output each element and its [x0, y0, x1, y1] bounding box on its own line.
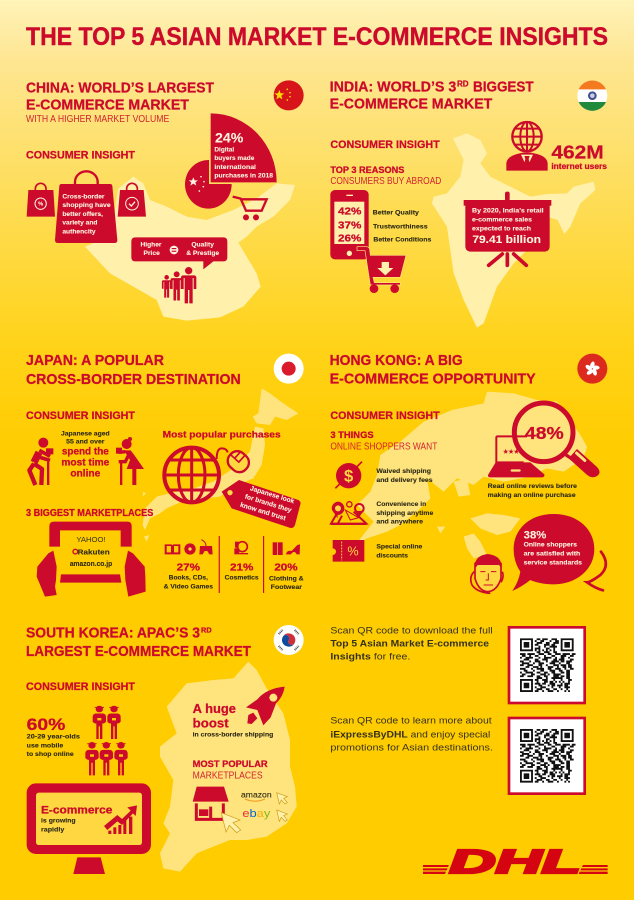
stat: magnifier 48%	[514, 403, 600, 477]
map: japan	[143, 388, 298, 542]
heading: india: INDIA: WORLD’S 3	[330, 80, 456, 96]
callout: higher price equals quality: Price	[144, 250, 160, 257]
text: aged 55 and over: 55 and over	[66, 439, 105, 446]
heading: south korea: LARGEST E-COMMERCE MARKET	[26, 644, 251, 660]
icon: discount ticket	[333, 540, 364, 562]
stat: books, cds and video games	[164, 540, 214, 590]
icon: discount bag	[27, 183, 55, 217]
subheading: consumer insight: CONSUMER INSIGHT	[26, 681, 135, 693]
heading: china	[26, 80, 214, 125]
stat: clothing and footwear	[263, 536, 304, 593]
icon: south korea flag	[274, 625, 304, 655]
icon: text shopping bag: shopping have	[62, 202, 111, 209]
icon: globe and mouse	[164, 448, 253, 502]
stat: cosmetics: 21%	[230, 563, 253, 574]
list: reasons: Better Conditions	[373, 236, 432, 243]
icon: shopping cart	[233, 197, 267, 220]
icon: discount ticket: %	[347, 545, 359, 559]
icon: text shopping bag: Cross-border	[62, 193, 105, 200]
icon: internet user	[506, 122, 548, 171]
callout: speech bubble 38%	[512, 514, 594, 591]
callout: billboard retail sales: 79.41 billion	[472, 234, 541, 246]
text: special discounts	[376, 544, 423, 559]
callout: price tag: Japanese look	[249, 485, 295, 505]
heading: india: BIGGEST	[473, 80, 534, 96]
text: a huge boost: A huge	[193, 701, 236, 716]
qr code: download insights	[508, 626, 586, 704]
subheading: 3 things: 3 THINGS	[330, 430, 374, 440]
callout: billboard retail sales: e-commerce sales	[472, 217, 532, 224]
callout: higher price equals quality: & Prestige	[186, 250, 219, 257]
logo: ebay: ebay	[242, 808, 271, 820]
icon: phone with reasons: 42%	[338, 207, 361, 218]
text: convenience: and anywhere	[376, 519, 423, 526]
subheading: most popular marketplaces: MARKETPLACES	[193, 770, 263, 781]
icon: store	[193, 787, 229, 819]
stat: 60% mobile shoppers: to shop online	[27, 751, 74, 758]
text: read online reviews: Read online reviews before	[488, 483, 577, 490]
icon: japan flag	[274, 354, 304, 384]
icon: monitor e-commerce	[27, 783, 151, 874]
icon: text shopping bag: authencity	[62, 228, 96, 235]
stat: 60% mobile shoppers: 60%	[27, 715, 66, 734]
heading: india	[330, 80, 534, 113]
icon: india flag	[577, 81, 607, 111]
text: special discounts: Special online	[376, 544, 423, 551]
panel: qr codes and logo	[330, 626, 608, 881]
icon: map pins	[331, 502, 366, 525]
icon: phone with reasons: 37%	[338, 220, 361, 231]
subheading: 3 biggest marketplaces: 3 BIGGEST MARKETPLACES	[26, 508, 154, 519]
panel: south korea	[26, 625, 304, 874]
stat: internet users	[551, 142, 608, 171]
text: aged 55 and over	[61, 430, 110, 480]
heading: south korea: RD	[201, 626, 212, 635]
heading: india: E-COMMERCE MARKET	[330, 97, 493, 113]
callout: price tag	[222, 480, 301, 528]
panel: india	[330, 80, 608, 328]
stat: magnifier 48%: 48%	[525, 423, 564, 443]
icon: rocket	[246, 687, 285, 725]
subheading: top 3 reasons: TOP 3 REASONS	[330, 165, 404, 175]
text: read online reviews: making an online purchase	[488, 492, 576, 499]
icon: text shopping bag	[55, 171, 117, 243]
stat: books, cds and video games: Books, CDs,	[169, 574, 208, 581]
icon: five mobile shoppers	[85, 706, 128, 775]
chart: 24% pie: buyers made	[214, 155, 255, 162]
logo: amazon: amazon	[241, 790, 272, 800]
icon: waived dollar: $	[344, 467, 354, 486]
subheading: most popular purchases: Most popular purchases	[163, 429, 281, 439]
stat: books, cds and video games: & Video Games	[164, 583, 214, 590]
callout: speech bubble 38%: Online shoppers	[524, 542, 577, 549]
text: download insights: Scan QR code to download the full	[330, 626, 493, 636]
icon: cart with arrow	[357, 247, 406, 293]
callout: price tag: know and trust	[239, 502, 287, 522]
icon: text shopping bag: better offers,	[62, 211, 103, 218]
heading: hong kong: E-COMMERCE OPPORTUNITY	[330, 371, 536, 387]
icon: monitor e-commerce: E-commerce	[41, 805, 112, 817]
heading: south korea	[26, 626, 251, 660]
text: waived shipping: and delivery fees	[376, 477, 433, 484]
icon: text shopping bag: variety and	[62, 220, 97, 227]
icon: tablet with marketplaces: Rakuten	[78, 547, 110, 556]
text: convenience: shipping anytime	[376, 510, 434, 517]
text: download insights: Insights for free.	[330, 652, 410, 662]
icon: elderly man	[29, 438, 53, 485]
icon: discount bag: %	[38, 202, 43, 208]
subheading: most popular marketplaces: MOST POPULAR	[193, 759, 268, 769]
stat: cosmetics	[219, 536, 259, 593]
icon: small cursors	[277, 793, 287, 821]
heading: hong kong	[330, 353, 536, 387]
map: india	[432, 133, 595, 328]
subheading: 3 things	[330, 430, 437, 453]
text: waived shipping: Waived shipping	[376, 468, 431, 475]
map: south korea	[160, 662, 297, 872]
text: download insights: Top 5 Asian Market E-commerce	[330, 639, 489, 649]
text: iExpressByDHL: promotions for Asian destinations.	[330, 742, 493, 752]
text: a huge boost: in cross-border shipping	[193, 732, 273, 739]
stat: 60% mobile shoppers: 20-29 year-olds	[27, 734, 81, 741]
heading: china: CHINA: WORLD’S LARGEST	[26, 80, 214, 96]
stat: clothing and footwear: Clothing &	[269, 575, 304, 582]
text: aged 55 and over: most time	[61, 458, 110, 469]
chart: 24% pie: international	[214, 164, 256, 171]
subheading: top 3 reasons	[330, 165, 441, 187]
logo: dhl	[423, 844, 608, 881]
map: hong kong	[355, 392, 587, 545]
stat: clothing and footwear: Footwear	[271, 584, 303, 591]
icon: tablet with marketplaces: YAHOO!	[76, 535, 106, 544]
stat: internet users: internet users	[551, 162, 608, 171]
heading: japan: JAPAN: A POPULAR	[26, 353, 165, 369]
heading: japan	[26, 353, 241, 388]
stat: 60% mobile shoppers: use mobile	[27, 742, 64, 749]
icon: hong kong flag	[577, 354, 607, 384]
heading: hong kong: HONG KONG: A BIG	[330, 353, 463, 369]
text: iExpressByDHL: Scan QR code to learn more about	[330, 716, 492, 726]
chart: 24% pie: Digital	[214, 146, 234, 153]
icon: laptop: ★★★	[503, 448, 520, 455]
text: a huge boost	[193, 701, 273, 739]
callout: billboard retail sales: By 2020, India’s retail	[472, 208, 544, 215]
icon: monitor e-commerce: rapidly	[41, 826, 65, 833]
list: reasons: Trustworthiness	[373, 223, 428, 230]
stat: books, cds and video games: 27%	[177, 563, 200, 574]
text: aged 55 and over: spend the	[62, 447, 109, 458]
icon: china flag	[274, 80, 304, 110]
icon: tablet with marketplaces	[37, 522, 146, 597]
heading: india: RD	[457, 80, 469, 89]
panel: japan	[26, 353, 304, 597]
list: reasons	[373, 210, 432, 243]
text: aged 55 and over: Japanese aged	[61, 430, 110, 437]
text: iExpressByDHL	[330, 716, 493, 752]
subheading: consumer insight: CONSUMER INSIGHT	[26, 410, 135, 422]
icon: waived dollar	[335, 462, 362, 488]
callout: higher price equals quality: Higher	[140, 241, 162, 248]
subheading: consumer insight: CONSUMER INSIGHT	[330, 410, 440, 422]
text: special discounts: discounts	[376, 552, 408, 559]
text: read online reviews	[488, 483, 577, 499]
text: a huge boost: boost	[193, 715, 229, 730]
subheading: 3 things: ONLINE SHOPPERS WANT	[330, 442, 437, 453]
panel: china	[26, 80, 304, 321]
callout: speech bubble 38%: 38%	[524, 529, 547, 541]
text: iExpressByDHL: iExpressByDHL and enjoy special	[330, 729, 490, 739]
callout: speech bubble 38%: are satisfied with	[524, 551, 580, 558]
callout: speech bubble 38%: service standards	[524, 559, 582, 566]
stat: internet users: 462M	[551, 142, 604, 163]
chart: 24% pie: purchases in 2018	[214, 172, 273, 179]
text: download insights	[330, 626, 493, 662]
icon: phone with reasons	[330, 190, 369, 259]
callout: higher price equals quality: Quality	[191, 241, 214, 248]
callout: price tag: for brands they	[244, 493, 293, 514]
heading: japan: CROSS-BORDER DESTINATION	[26, 372, 241, 388]
map: china	[85, 177, 295, 321]
stat: clothing and footwear: 20%	[274, 563, 298, 574]
icon: support agent	[471, 554, 503, 593]
qr code: iExpressByDHL	[508, 717, 586, 795]
logo: dhl: DHL	[449, 844, 581, 881]
heading: south korea: SOUTH KOREA: APAC’S 3	[26, 626, 200, 642]
subheading: consumer insight: CONSUMER INSIGHT	[26, 150, 135, 162]
text: convenience: Convenience in	[376, 501, 426, 508]
icon: elderly woman	[116, 437, 144, 485]
subheading: top 3 reasons: CONSUMERS BUY ABROAD	[330, 176, 441, 187]
icon: monitor e-commerce: is growing	[41, 818, 76, 825]
map: hong kong island	[437, 478, 520, 558]
icon: tablet with marketplaces: amazon.co.jp	[70, 559, 113, 568]
icon: check bag	[118, 183, 146, 217]
panel: hong kong	[330, 353, 607, 593]
chart: 24% pie: 24%	[215, 129, 244, 145]
text: convenience	[376, 501, 434, 526]
text: aged 55 and over: online	[70, 469, 101, 480]
callout: billboard retail sales	[464, 192, 551, 265]
stat: cosmetics: Cosmetics	[225, 574, 259, 581]
list: reasons: Better Quality	[373, 210, 420, 217]
subheading: consumer insight: CONSUMER INSIGHT	[330, 139, 440, 151]
heading: china: E-COMMERCE MARKET	[26, 97, 189, 113]
callout: billboard retail sales: expected to reach	[472, 225, 531, 232]
callout: higher price equals quality	[131, 237, 227, 269]
heading: china: WITH A HIGHER MARKET VOLUME	[26, 114, 170, 125]
decoration: headset cord	[587, 552, 606, 590]
icon: phone with reasons: 26%	[338, 233, 361, 244]
subheading: most popular marketplaces	[193, 759, 268, 781]
icon: laptop	[488, 436, 544, 477]
stat: 60% mobile shoppers	[27, 715, 81, 758]
icon: people	[162, 267, 196, 303]
text: waived shipping	[376, 468, 433, 484]
chart: 24% pie	[185, 113, 277, 209]
icon: cursor	[221, 813, 241, 833]
